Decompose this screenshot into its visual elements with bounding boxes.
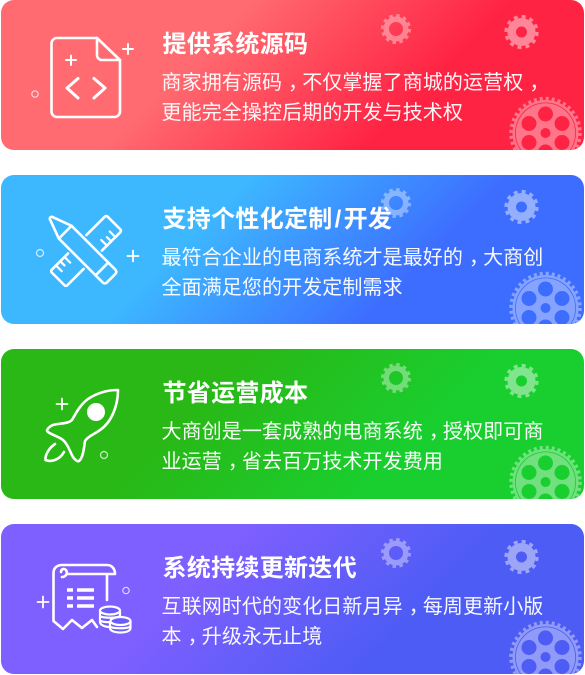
panel: customization (1, 175, 584, 324)
icon: rocket (45, 390, 118, 461)
text block (162, 246, 543, 298)
panel: lower costs (1, 349, 584, 499)
text block: 全面满足您的开发定制需求 (162, 276, 403, 298)
panel: source code (1, 0, 584, 150)
text block (162, 72, 549, 124)
text block: 互联网时代的变化日新月异 ，每周更新小版 (162, 596, 543, 618)
heading: 提供系统源码 (162, 31, 308, 58)
icon: code file (32, 38, 133, 117)
text block: 商家拥有源码 ，不仅掌握了商城的运营权 ， (162, 72, 549, 94)
text block: 业运营 ，省去百万技术开发费用 (162, 450, 443, 472)
text block: 更能完全操控后期的开发与技术权 (162, 102, 463, 124)
heading: 节省运营成本 (162, 380, 308, 407)
text block: 最符合企业的电商系统才是最好的 ，大商创 (162, 247, 543, 269)
text block (162, 596, 543, 648)
heading: 支持个性化定制/开发 (162, 206, 392, 233)
heading: 系统持续更新迭代 (162, 555, 357, 582)
icon: pencil and ruler (36, 211, 138, 287)
text block (162, 421, 543, 472)
gears decoration (382, 16, 580, 168)
panel: continuous updates (1, 524, 584, 674)
gears decoration (382, 190, 580, 342)
text block: 大商创是一套成熟的电商系统 ，授权即可商 (162, 421, 543, 443)
gears decoration (382, 540, 580, 675)
gears decoration (382, 364, 580, 516)
text block: 本 ，升级永无止境 (162, 626, 322, 648)
icon: receipt and coins (38, 565, 130, 632)
